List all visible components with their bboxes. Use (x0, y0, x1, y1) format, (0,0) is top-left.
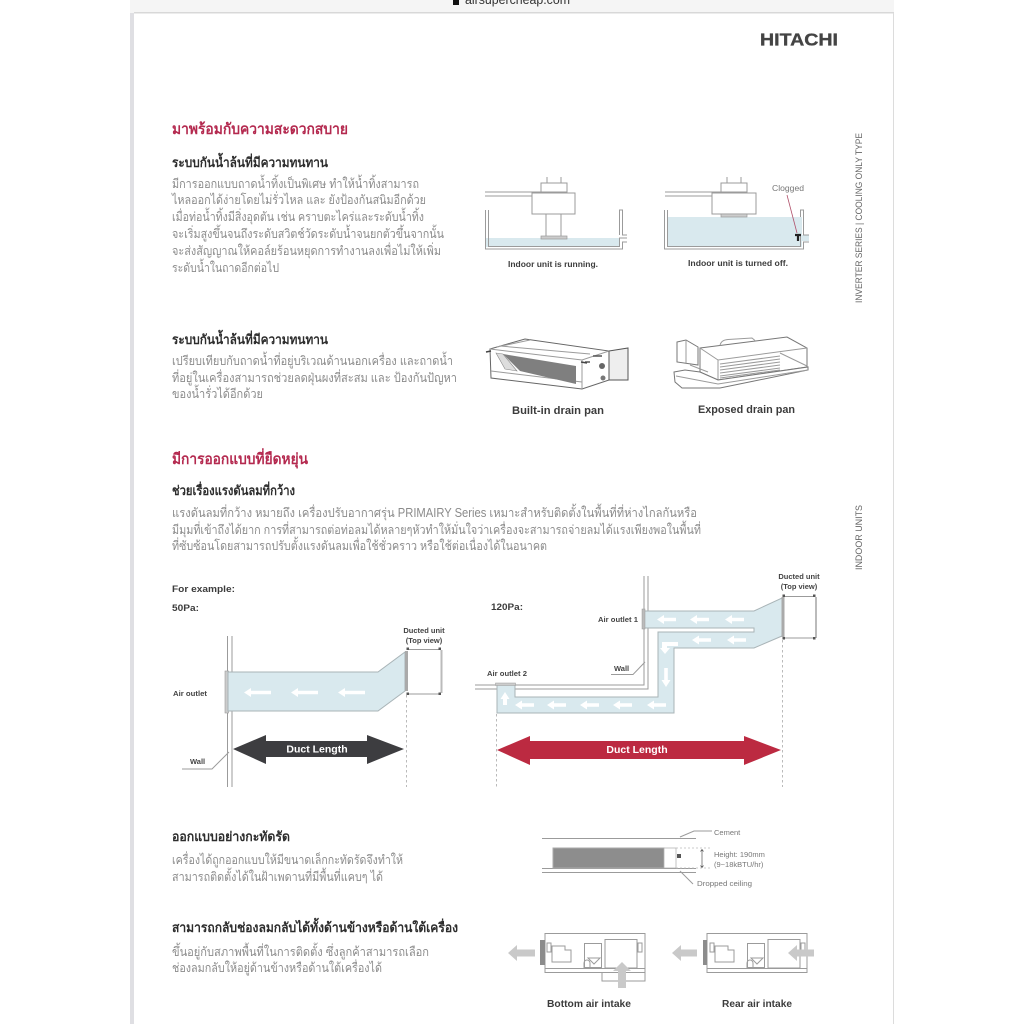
diagram: built-in drain pan (486, 339, 628, 417)
diagram: 50Pa duct (172, 603, 445, 787)
body text: ช่องลมกลับให้อยู่ด้านข้างหรือด้านใต้เครื่องได้ (172, 959, 382, 976)
body text: จะเริ่มสูงขึ้นจนถึงระดับสวิตช์วัดระดับน้ำจนยกตัวขึ้นจากนั้น (172, 224, 444, 242)
body text: ที่ซับซ้อนโดยสามารถปรับตั้งแรงดันลมเพื่อใช้ชั่วคราว หรือใช้ต่อเนื่องได้ในอนาคต (172, 536, 547, 553)
ducted unit (403, 626, 445, 695)
label: air outlet 2: Air outlet 2 (487, 669, 527, 678)
body text: มีมุมที่เข้าถึงได้ยาก การที่สามารถต่อท่อลมได้หลายๆหัวทำให้มั่นใจว่าเครื่องจะสามารถจ่ายลมได้แรงเพียงพอในพื้นที่ (172, 520, 701, 538)
label: dropped ceiling: Dropped ceiling (697, 879, 752, 888)
diagram: bottom air intake (508, 934, 645, 1010)
body text: ขึ้นอยู่กับสภาพพื้นที่ในการติดตั้ง ซึ่งลูกค้าสามารถเลือก (172, 942, 429, 960)
label: wall: Wall (190, 757, 205, 766)
duct (228, 652, 405, 711)
duct (496, 598, 782, 713)
diagram: rear air intake (672, 934, 814, 1010)
body text (172, 503, 701, 553)
caption: Bottom air intake (547, 999, 631, 1010)
arrow: duct length (233, 735, 404, 764)
diagram: indoor unit running (485, 177, 627, 269)
page sheet (130, 0, 894, 1024)
ducted unit (778, 572, 820, 640)
label: height (714, 850, 765, 869)
arrow: duct length (497, 736, 781, 765)
label: wall: Wall (614, 664, 629, 673)
caption: Rear air intake (722, 999, 792, 1010)
label: wall (182, 752, 229, 769)
ducted unit: (Top view) (406, 636, 443, 645)
text block: overflow protection (171, 152, 444, 275)
label: 120Pa: 120Pa: (491, 602, 523, 613)
arrow: duct length: Duct Length (286, 744, 348, 756)
subheading: ช่วยเรื่องแรงดันลมที่กว้าง (172, 481, 295, 498)
diagram: exposed drain pan (674, 337, 808, 416)
body text: เปรียบเทียบกับถาดน้ำที่อยู่บริเวณด้านนอกเครื่อง และถาดน้ำ (172, 351, 453, 369)
text block: return air (172, 917, 458, 976)
ducted unit: Ducted unit (778, 572, 820, 581)
diagram: ceiling height (542, 828, 765, 888)
body text: สามารถติดตั้งได้ในฝ้าเพดานที่มีพื้นที่แคบๆ ได้ (172, 867, 383, 884)
body text: ระดับน้ำในถาดอีกต่อไป (172, 258, 279, 275)
label: height: (9~18kBTU/hr) (714, 860, 764, 869)
caption: Indoor unit is turned off. (688, 258, 788, 268)
subheading: ระบบกันน้ำล้นที่มีความทนทาน (172, 152, 328, 170)
diagram: indoor unit off, clogged (664, 177, 809, 268)
label: height: Height: 190mm (714, 850, 765, 859)
text block: drain pan (172, 329, 457, 401)
arrow: air out (672, 945, 697, 961)
subheading: สามารถกลับช่องลมกลับได้ทั้งด้านข้างหรือด้านใต้เครื่อง (172, 917, 458, 935)
body text: เมื่อท่อน้ำทิ้งมีสิ่งอุดตัน เช่น คราบตะไคร่และระดับน้ำทิ้ง (172, 207, 424, 225)
body text: จะส่งสัญญาณให้คอล์ยร้อนหยุดการทำงานลงเพื่อไม่ให้เพิ่ม (172, 242, 441, 259)
ducted unit: Ducted unit (403, 626, 445, 635)
body text: มีการออกแบบถาดน้ำทิ้งเป็นพิเศษ ทำให้น้ำทิ้งสามารถ (172, 174, 419, 191)
body text: เครื่องได้ถูกออกแบบให้มีขนาดเล็กกะทัดรัดจึงทำให้ (172, 851, 403, 868)
body text (172, 942, 429, 976)
caption: Built-in drain pan (512, 405, 604, 417)
arrow: duct length: Duct Length (606, 744, 668, 756)
body text: ของน้ำรั่วได้อีกด้วย (172, 384, 263, 401)
arrow: air out (508, 945, 535, 961)
logo: HITACHI: HITACHI (760, 30, 838, 50)
side label: series: INVERTER SERIES | COOLING ONLY TYPE (854, 133, 865, 303)
heading: flexible design: มีการออกแบบที่ยืดหยุ่น (172, 448, 309, 469)
label: for example: For example: (172, 584, 235, 595)
subheading: ออกแบบอย่างกะทัดรัด (172, 829, 290, 844)
body text: ไหลออกได้ง่ายโดยไม่รั่วไหล และ ยังป้องกันสนิมอีกด้วย (171, 191, 426, 207)
caption: Exposed drain pan (698, 404, 795, 416)
label: air outlet 1: Air outlet 1 (598, 615, 638, 624)
side label: indoor units: INDOOR UNITS (854, 505, 865, 570)
body text: ที่อยู่ในเครื่องสามารถช่วยลดฝุ่นผงที่สะสม และ ป้องกันปัญหา (172, 369, 457, 386)
label: cement: Cement (714, 828, 741, 837)
ducted unit: (Top view) (781, 582, 818, 591)
body text (171, 174, 444, 275)
clogged label (772, 183, 804, 241)
label: wall (611, 662, 645, 674)
body text (172, 851, 403, 884)
heading: convenience: มาพร้อมกับความสะดวกสบาย (172, 121, 348, 138)
arrow: rear intake (788, 945, 814, 961)
arrow: bottom intake (613, 962, 631, 988)
label: air outlet: Air outlet (173, 689, 208, 698)
clogged label: Clogged (772, 183, 804, 193)
text block: compact design (172, 829, 403, 884)
body text: แรงดันลมที่กว้าง หมายถึง เครื่องปรับอากาศรุ่น PRIMAIRY Series เหมาะสำหรับติดตั้งในพื้นที่ที่ห่างไกลกันหรือ (172, 503, 697, 521)
label: 50Pa: 50Pa: (172, 603, 199, 614)
body text (172, 351, 457, 401)
text block: static pressure (172, 481, 701, 553)
subheading: ระบบกันน้ำล้นที่มีความทนทาน (172, 329, 328, 347)
caption: Indoor unit is running. (508, 259, 598, 269)
diagram: 120Pa duct (475, 572, 820, 787)
